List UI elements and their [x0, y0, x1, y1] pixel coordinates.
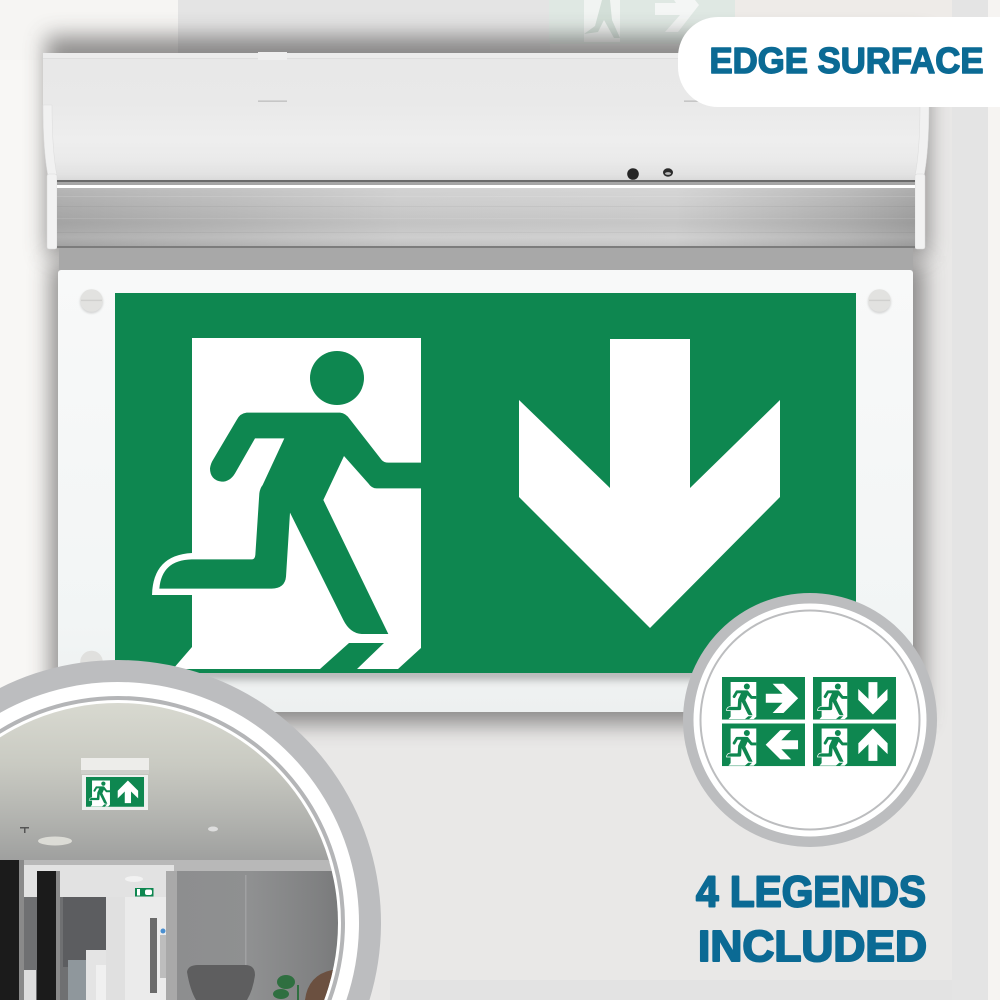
plant — [273, 975, 299, 1000]
sign mounting: housing and aluminium bar — [43, 52, 929, 271]
shadow under green sign — [120, 668, 850, 680]
legend: left arrow — [722, 724, 805, 766]
aluminium bar — [57, 180, 915, 248]
screw: bottom left — [80, 651, 103, 673]
ceiling exit sign — [86, 777, 144, 807]
photo of sign installed in office — [0, 700, 342, 1000]
ceiling sign housing — [81, 758, 149, 810]
legend: right arrow — [722, 677, 805, 720]
device shadows — [46, 36, 928, 724]
grey gap strip — [59, 248, 913, 271]
badge heading: EDGE SURFACE — [710, 40, 984, 81]
photo ring — [0, 660, 381, 1000]
caption: 4 legends included: INCLUDED — [698, 922, 927, 971]
screw: top right — [868, 289, 891, 314]
caption: 4 legends included: 4 LEGENDS — [696, 868, 926, 916]
housing top lip — [43, 52, 929, 102]
left end cap — [43, 105, 57, 249]
running man and door — [115, 293, 856, 673]
ghost reflected sign at top — [549, 0, 735, 44]
distant exit sign — [135, 888, 154, 896]
screw: top left — [80, 289, 103, 314]
main green exit sign — [115, 293, 856, 673]
caption: 4 legends included — [696, 868, 927, 971]
legend: up arrow — [813, 724, 896, 766]
white housing — [43, 53, 929, 181]
legends circle — [683, 593, 937, 847]
icon: down arrow — [519, 339, 780, 628]
inset photo circle — [0, 660, 381, 1000]
badge: edge surface — [678, 17, 1000, 107]
indicator buttons — [627, 168, 673, 180]
right end cap — [915, 105, 929, 249]
black pillars — [0, 860, 60, 1000]
circle ring — [683, 593, 937, 847]
armchair — [187, 965, 255, 1000]
legend: down arrow — [813, 677, 896, 720]
acrylic sign panel — [58, 270, 913, 712]
wicker chair — [305, 970, 333, 1000]
